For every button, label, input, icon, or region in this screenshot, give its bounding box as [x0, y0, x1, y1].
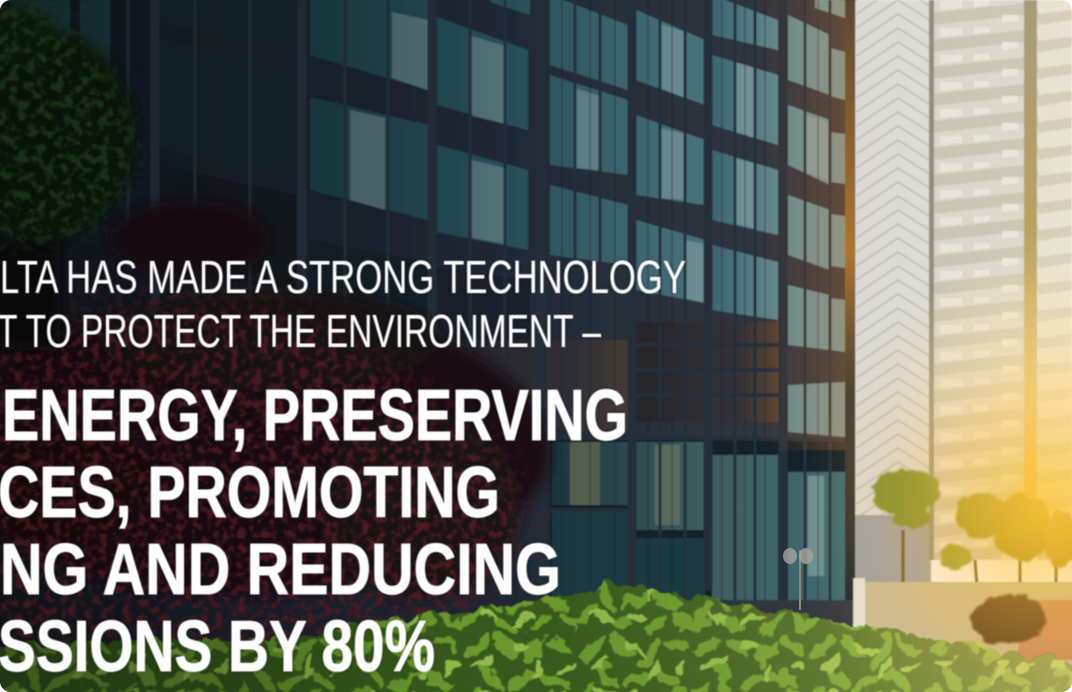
- tree: dark green left foliage: [0, 0, 138, 350]
- headline text: ENERGY, PRESERVING: [2, 376, 628, 456]
- intro text: T TO PROTECT THE ENVIRONMENT –: [0, 305, 601, 357]
- mullions: [128, 0, 850, 600]
- ground floor glazing: [550, 440, 850, 600]
- headline text: NG AND REDUCING: [0, 530, 561, 610]
- bushes: green foreground leaves: [0, 584, 1072, 692]
- headline text: CES, PROMOTING: [0, 453, 500, 533]
- street trees: [853, 468, 1072, 692]
- intro text: LTA HAS MADE A STRONG TECHNOLOGY: [0, 251, 686, 303]
- towers: pale skyscrapers at right: [855, 0, 1072, 605]
- building: dark glass facade: [0, 0, 857, 692]
- overlay: left shading: [0, 0, 702, 692]
- sunlight glow: [821, 253, 1072, 692]
- shrub: dark red foliage: [0, 200, 550, 650]
- headline text: [0, 376, 628, 687]
- camera pole: [783, 548, 813, 610]
- intro text: [0, 258, 686, 348]
- chevron tower: [855, 0, 931, 605]
- lower spandrel floors: [430, 322, 780, 430]
- window reflections: [350, 12, 828, 303]
- headline text: SSIONS BY 80%: [0, 607, 435, 687]
- teal window rows: [310, 0, 705, 303]
- far tower: [1037, 0, 1072, 560]
- dark upper-left windows: [10, 0, 530, 350]
- banded office tower: [934, 0, 1026, 560]
